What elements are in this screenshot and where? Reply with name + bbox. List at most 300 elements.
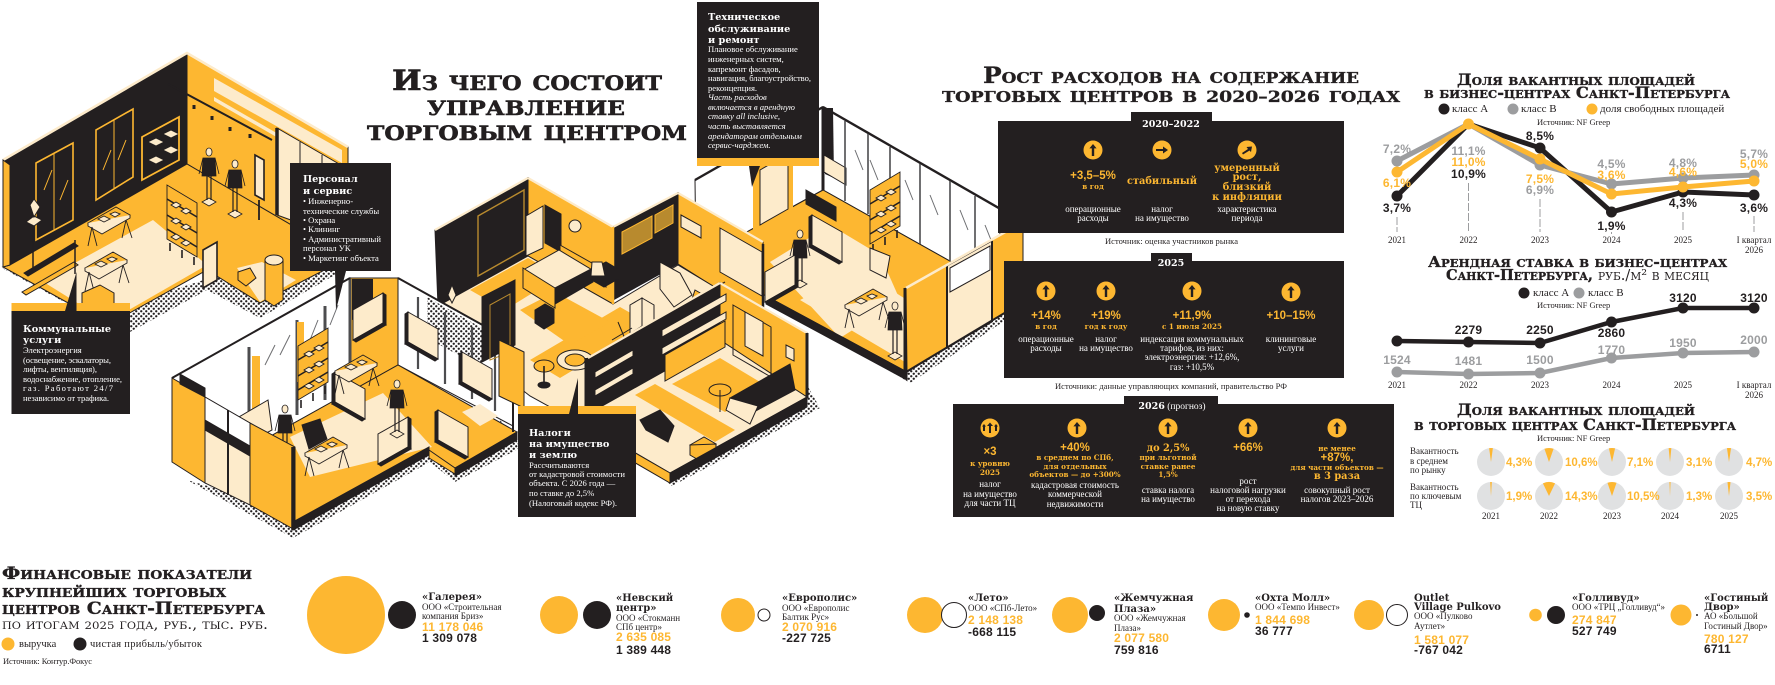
data labels: 5,7% xyxy=(1740,147,1768,161)
callout: staff and services: • Клининг xyxy=(303,224,341,234)
item: Galereya xyxy=(307,576,501,654)
source note: Источник: Контур.Фокус xyxy=(3,656,92,666)
item: Evropolis: ООО «Европолис xyxy=(782,603,850,613)
item: tax x3 xyxy=(963,418,1017,508)
item: Hollywood: «Голливуд» xyxy=(1572,593,1640,604)
item: Galereya: 11 178 046 xyxy=(422,620,484,634)
data labels: 3,6% xyxy=(1740,201,1768,215)
callout: maintenance and repair: включается в арендную xyxy=(708,102,795,112)
item: operating costs: операционные xyxy=(1065,204,1121,214)
year axis: 2025 xyxy=(1720,511,1738,521)
chart: office vacancy: Источник: NF Greep xyxy=(1537,117,1610,127)
item: tax x3: на имущество xyxy=(963,489,1017,499)
item: tax rate: 1,5% xyxy=(1158,470,1178,479)
callout: maintenance and repair: часть выставляется xyxy=(708,121,786,131)
year axis: 2026 xyxy=(1745,245,1764,255)
year axis: 2023 xyxy=(1531,235,1550,245)
callout: maintenance and repair: Часть расходов xyxy=(708,92,767,102)
year axis: 2024 xyxy=(1602,235,1621,245)
year axis: 2022 xyxy=(1460,235,1478,245)
year axis: 2024 xyxy=(1602,380,1621,390)
item: Nevsky Centre: 2 635 085 xyxy=(616,630,671,644)
chart: retail vacancy pies xyxy=(1410,400,1772,521)
callout: property and land taxes: (Налоговый кодекс РФ). xyxy=(529,498,617,508)
item: Hollywood: 527 749 xyxy=(1572,624,1617,638)
item: Evropolis: -227 725 xyxy=(782,631,831,645)
chart: retail vacancy pies: Источник: NF Greep xyxy=(1537,433,1610,443)
item: tax rate: ставке ранее xyxy=(1141,462,1196,471)
pies: key shopping centres: 3,5% xyxy=(1746,491,1772,503)
item: Gostiny Dvor: Двор» xyxy=(1704,602,1740,613)
legend: revenue and profit: чистая прибыль/убыток xyxy=(90,639,203,650)
panel: 2020-2022 xyxy=(998,112,1344,233)
data labels: 3120 xyxy=(1740,291,1768,305)
series: class A xyxy=(1392,302,1760,348)
heading: financial indicators: центров Санкт-Петербурга xyxy=(2,599,265,619)
item: tax rate: на имущество xyxy=(1141,494,1195,504)
data labels: 2250 xyxy=(1526,323,1554,337)
item: Zhemchuzhnaya Plaza: Плаза» xyxy=(1114,623,1141,633)
callout: staff and services: • Административный xyxy=(303,234,381,244)
illustration: isometric shopping centre xyxy=(2,53,1023,538)
callout: maintenance and repair: инженерных систем, xyxy=(708,54,784,64)
item: tax x3: 2025 xyxy=(980,468,1000,477)
legend xyxy=(1438,103,1724,115)
callout: maintenance and repair: Плановое обслуживание xyxy=(708,44,798,54)
heading: Доля вакантных площадей xyxy=(1457,400,1695,419)
legend: класс В xyxy=(1588,287,1624,299)
data labels: 1950 xyxy=(1669,336,1697,350)
pies: key shopping centres: 1,9% xyxy=(1506,491,1532,503)
room 1: top-left shop xyxy=(3,53,348,325)
item: Zhemchuzhnaya Plaza: ООО «Жемчужная xyxy=(1114,613,1186,623)
item: Evropolis: 2 070 916 xyxy=(782,620,837,634)
item: Leto: 2 148 138 xyxy=(968,613,1023,627)
item: Evropolis: «Европолис» xyxy=(782,593,857,604)
pies: key shopping centres: 10,5% xyxy=(1627,491,1660,503)
data labels: 4,6% xyxy=(1669,165,1697,179)
item: operating costs: расходы xyxy=(1077,213,1109,223)
heading: cost growth: Рост расходов на содержание xyxy=(983,63,1359,89)
data labels: 1770 xyxy=(1598,343,1625,357)
item: Gostiny Dvor: АО «Большой xyxy=(1704,611,1758,621)
item: cleaning: +10–15% xyxy=(1267,310,1315,322)
item: tax burden: на новую ставку xyxy=(1217,503,1280,513)
item: cadastral value: коммерческой xyxy=(1048,489,1102,499)
legend: класс А xyxy=(1533,287,1569,299)
item: Nevsky Centre: СПб центр» xyxy=(616,622,662,632)
item: Outlet Village Pulkovo: ООО «Пулково xyxy=(1414,611,1473,621)
callout: property and land taxes: и землю xyxy=(529,450,577,461)
legend: класс А xyxy=(1452,103,1488,115)
item: period character: рост, xyxy=(1233,172,1261,183)
item: period character: периода xyxy=(1232,213,1262,223)
heading: financial indicators: по итогам 2025 года, руб., тыс. руб. xyxy=(2,617,268,633)
item: cumulative growth: +87%, xyxy=(1321,452,1353,464)
callout: staff and services: Персонал xyxy=(303,174,358,185)
heading: Арендная ставка в бизнес-центрах xyxy=(1428,253,1727,271)
item: cumulative growth: для части объектов — xyxy=(1290,463,1384,472)
callout: utilities: газ. Работают 24/7 xyxy=(23,383,114,393)
callout: property and land taxes: по ставке до 2,5% xyxy=(529,488,594,498)
row labels: Вакантность xyxy=(1410,482,1459,492)
row labels: ТЦ xyxy=(1410,500,1422,510)
panel: 2025: 2025 xyxy=(1158,258,1184,269)
chart: office vacancy xyxy=(1383,70,1772,255)
item: tax x3: ×3 xyxy=(983,446,997,458)
item: tax burden xyxy=(1210,418,1286,513)
data labels: 2000 xyxy=(1740,333,1768,347)
item: cadastral value: кадастровая стоимость xyxy=(1031,480,1119,490)
item: property tax: стабильный xyxy=(1127,176,1197,187)
item: property tax: год к году xyxy=(1085,322,1128,331)
item: Zhemchuzhnaya Plaza: 759 816 xyxy=(1114,643,1159,657)
row labels xyxy=(1410,446,1462,510)
item: Outlet Village Pulkovo: 1 581 077 xyxy=(1414,633,1469,647)
callout: utilities: независимо от трафика. xyxy=(23,393,109,403)
legend: доля свободных площадей xyxy=(1600,103,1724,115)
data labels: 11,0% xyxy=(1451,155,1486,169)
item: period character xyxy=(1212,140,1282,223)
title: Из чего состоит xyxy=(392,64,662,97)
pies: key shopping centres xyxy=(1477,482,1772,510)
panel: 2026 forecast xyxy=(953,396,1394,517)
item: Okhta Mall: 1 844 698 xyxy=(1255,613,1310,627)
item: cadastral value: в среднем по СПб, xyxy=(1036,453,1114,462)
item: Nevsky Centre: «Невский xyxy=(616,593,674,604)
item: cumulative growth: налогов 2023–2026 xyxy=(1301,494,1374,504)
year axis: 2022 xyxy=(1540,511,1558,521)
item: Hollywood: 274 847 xyxy=(1572,613,1617,627)
room 2: bottom-left glass-walled shop xyxy=(172,278,517,530)
item: tax rate: ставка налога xyxy=(1142,485,1194,495)
item: property tax: на имущество xyxy=(1135,213,1189,223)
data labels: 7,2% xyxy=(1383,142,1411,156)
heading: cost growth xyxy=(942,63,1400,108)
year axis: 2025 xyxy=(1674,235,1692,245)
pies: market average: 4,7% xyxy=(1746,457,1772,469)
series: total vacancy xyxy=(1392,118,1760,200)
item: tax burden: рост xyxy=(1239,476,1257,486)
item: operating costs: в год xyxy=(1035,322,1057,331)
item: utility tariffs: газ: +10,5% xyxy=(1170,362,1215,372)
item: Zhemchuzhnaya Plaza xyxy=(1052,593,1194,657)
item: tax burden: от перехода xyxy=(1226,494,1270,504)
row labels: по ключевым xyxy=(1410,491,1462,501)
callout: property and land taxes: Налоги xyxy=(529,428,571,439)
item: operating costs: операционные xyxy=(1018,334,1074,344)
data labels: 1,9% xyxy=(1597,219,1626,233)
item: utility tariffs: +11,9% xyxy=(1173,310,1211,322)
item: Gostiny Dvor: 780 127 xyxy=(1704,632,1749,646)
data labels: 1524 xyxy=(1383,353,1411,367)
year axis: 2023 xyxy=(1531,380,1550,390)
year axis: 2021 xyxy=(1388,380,1406,390)
series: class A xyxy=(1392,124,1760,218)
callout: utilities xyxy=(12,272,130,414)
heading: в торговых центрах Санкт-Петербурга xyxy=(1414,415,1736,434)
item: Okhta Mall: 36 777 xyxy=(1255,624,1293,638)
callout: utilities: лифты, вентиляция), xyxy=(23,364,97,374)
year axis: 2021 xyxy=(1482,511,1500,521)
room 3: bedroom floor and walls xyxy=(435,178,807,473)
year axis: 2021 xyxy=(1388,235,1406,245)
item: cadastral value: недвижимости xyxy=(1047,499,1103,509)
year axis: 2022 xyxy=(1460,380,1478,390)
item: cadastral value: для отдельных xyxy=(1044,462,1107,471)
heading: cost growth: торговых центров в 2020–2026 годах xyxy=(942,82,1400,108)
item: cleaning xyxy=(1266,282,1316,353)
item: Galereya: компания Бриз» xyxy=(422,611,483,621)
item: tax x3: для части ТЦ xyxy=(965,498,1016,508)
item: period character: к инфляции xyxy=(1212,192,1282,203)
panel: 2025 xyxy=(1004,253,1344,378)
year axis: 2023 xyxy=(1603,511,1622,521)
item: cadastral value: объектов — до +300% xyxy=(1029,470,1121,479)
item: Zhemchuzhnaya Plaza: 2 077 580 xyxy=(1114,631,1169,645)
heading: Санкт-Петербурга, руб./м² в месяц xyxy=(1446,266,1709,284)
item: Gostiny Dvor: «Гостиный xyxy=(1704,593,1769,604)
callout: maintenance and repair: арендаторам отдельным xyxy=(708,131,802,141)
chart: office rent xyxy=(1383,253,1772,400)
callout: maintenance and repair: Техническое xyxy=(708,12,780,23)
callout: utilities: Коммунальные xyxy=(23,324,111,335)
data labels: 5,0% xyxy=(1740,157,1768,171)
item: Leto: -668 115 xyxy=(968,625,1016,639)
item: Galereya: ООО «Строительная xyxy=(422,602,501,612)
callout: utilities: (освещение, эскалаторы, xyxy=(23,355,111,365)
callout: staff and services: и сервис xyxy=(303,186,352,197)
item: Nevsky Centre: ООО «Стокманн xyxy=(616,613,680,623)
callout: utilities: водоснабжение, отопление, xyxy=(23,374,122,384)
pies: key shopping centres: 1,3% xyxy=(1686,491,1712,503)
item: utility tariffs: с 1 июля 2025 xyxy=(1162,322,1222,331)
data labels: 6,9% xyxy=(1526,183,1554,197)
heading xyxy=(1428,253,1727,284)
room 4: bathroom xyxy=(613,193,763,318)
callout: staff and services: персонал УК xyxy=(303,243,351,253)
callout: utilities: Электроэнергия xyxy=(23,345,82,355)
callout: property and land taxes xyxy=(518,378,636,517)
item: operating costs: +3,5–5% xyxy=(1070,170,1116,182)
series: class B xyxy=(1392,346,1760,380)
callout: maintenance and repair: реконцепция. xyxy=(708,83,757,93)
item: utility tariffs: электроэнергия: +12,6%, xyxy=(1145,352,1239,362)
heading xyxy=(1414,400,1736,434)
item: tax burden: налоговой нагрузки xyxy=(1210,485,1286,495)
heading: financial indicators xyxy=(2,564,268,633)
item: period character: характеристика xyxy=(1217,204,1277,214)
item: Leto: «Лето» xyxy=(968,593,1009,604)
partition between room 2 and room 3 xyxy=(482,280,524,408)
callout: maintenance and repair: ставку all inclusive, xyxy=(708,111,780,121)
source note: Источник: оценка участников рынка xyxy=(1105,236,1238,246)
item: Gostiny Dvor: 6711 xyxy=(1704,642,1731,656)
legend: класс В xyxy=(1521,103,1557,115)
series: class B xyxy=(1392,124,1760,190)
item: Nevsky Centre xyxy=(540,593,680,657)
year axis xyxy=(1388,380,1772,400)
year axis xyxy=(1388,235,1772,255)
heading xyxy=(1424,70,1730,102)
callout: property and land taxes: от кадастровой стоимости xyxy=(529,469,625,479)
item: cumulative growth: совокупный рост xyxy=(1304,485,1370,495)
item: tax x3: к уровню xyxy=(970,459,1010,468)
heading: financial indicators: крупнейших торговых xyxy=(2,582,227,602)
item: Hollywood xyxy=(1529,593,1665,638)
room 5: front living room xyxy=(586,282,807,483)
item: Outlet Village Pulkovo: Аутлет» xyxy=(1414,621,1445,631)
item: tax rate: при льготной xyxy=(1139,453,1197,462)
data labels: 7,5% xyxy=(1526,172,1554,186)
item: operating costs xyxy=(1018,282,1074,353)
item: period character: умеренный xyxy=(1214,163,1280,174)
item: cadastral value: +40% xyxy=(1060,442,1090,454)
year axis: I квартал xyxy=(1737,380,1772,390)
item: Outlet Village Pulkovo: -767 042 xyxy=(1414,643,1463,657)
legend: revenue and profit: выручка xyxy=(19,639,57,650)
item: cumulative growth: в 3 раза xyxy=(1314,471,1361,482)
item: Evropolis: Балтик Рус» xyxy=(782,612,829,622)
item: operating costs xyxy=(1065,140,1121,223)
callout: staff and services xyxy=(290,163,391,310)
item: Outlet Village Pulkovo xyxy=(1354,593,1501,657)
data labels: 2860 xyxy=(1598,326,1625,340)
pies: key shopping centres: 14,3% xyxy=(1565,491,1598,503)
legend xyxy=(1518,287,1624,299)
item: cleaning: услуги xyxy=(1278,343,1304,353)
heading: Доля вакантных площадей xyxy=(1457,70,1695,89)
item: cumulative growth xyxy=(1290,418,1384,504)
data labels xyxy=(1383,129,1768,233)
item: Okhta Mall: «Охта Молл» xyxy=(1255,593,1330,604)
item: tax x3: налог xyxy=(979,479,1001,489)
legend: revenue and profit xyxy=(2,638,203,650)
callout: property and land taxes: Рассчитываются xyxy=(529,460,589,470)
item: operating costs: расходы xyxy=(1030,343,1062,353)
item: utility tariffs: индексация коммунальных xyxy=(1140,334,1244,344)
item: Leto: ООО «СПб-Лето» xyxy=(968,603,1037,613)
item: property tax: налог xyxy=(1095,334,1117,344)
item: utility tariffs: тарифов, из них: xyxy=(1160,343,1224,353)
pies: market average: 7,1% xyxy=(1627,457,1653,469)
data labels: 3120 xyxy=(1669,291,1697,305)
item: cleaning: клининговые xyxy=(1266,334,1316,344)
row labels: в среднем xyxy=(1410,456,1448,466)
item: Okhta Mall xyxy=(1208,593,1340,638)
item: Leto xyxy=(907,593,1037,639)
callout: property and land taxes: на имущество xyxy=(529,439,610,450)
callout: maintenance and repair: навигация, благоустройство, xyxy=(708,73,811,83)
room 6: right glass-walled shop xyxy=(695,107,1023,380)
item: Gostiny Dvor xyxy=(1670,593,1769,656)
data labels: 2279 xyxy=(1455,323,1482,337)
pies: market average: 4,3% xyxy=(1506,457,1532,469)
item: tax rate: до 2,5% xyxy=(1147,443,1190,454)
pies: market average xyxy=(1477,448,1772,476)
callout: maintenance and repair: капремонт фасадов, xyxy=(708,64,781,74)
year axis: 2026 xyxy=(1745,390,1764,400)
item: Okhta Mall: ООО «Темпо Инвест» xyxy=(1255,602,1340,612)
heading: financial indicators: Финансовые показатели xyxy=(2,564,252,584)
item: Nevsky Centre: 1 389 448 xyxy=(616,643,671,657)
item: operating costs: в год xyxy=(1082,182,1104,191)
data labels: 1481 xyxy=(1455,354,1482,368)
heading: в бизнес-центрах Санкт-Петербурга xyxy=(1424,83,1730,102)
row labels: Вакантность xyxy=(1410,446,1459,456)
item: property tax xyxy=(1079,282,1133,353)
callout: staff and services: технические службы xyxy=(303,206,379,216)
data labels: 10,9% xyxy=(1451,167,1486,181)
source note: Источники: данные управляющих компаний, правительство РФ xyxy=(1055,381,1287,391)
item: Zhemchuzhnaya Plaza: «Жемчужная xyxy=(1114,593,1194,604)
item: property tax: +19% xyxy=(1091,310,1121,322)
halftone shadows xyxy=(2,250,1006,538)
item: Outlet Village Pulkovo: Outlet xyxy=(1414,593,1450,604)
item: Galereya: «Галерея» xyxy=(422,592,482,603)
item: Outlet Village Pulkovo: Village Pulkovo xyxy=(1413,602,1501,613)
callout: maintenance and repair: и ремонт xyxy=(708,35,759,46)
callout: maintenance and repair xyxy=(697,2,819,187)
item: utility tariffs xyxy=(1140,282,1244,372)
data labels: 3,7% xyxy=(1383,201,1411,215)
item: period character: близкий xyxy=(1223,182,1271,193)
data labels xyxy=(1383,291,1768,368)
panel: 2020-2022: 2020–2022 xyxy=(1142,119,1200,130)
data labels: 11,1% xyxy=(1451,144,1486,158)
item: tax rate xyxy=(1139,418,1197,504)
data labels: 8,5% xyxy=(1526,129,1554,143)
callout: property and land taxes: объекта. С 2026 года — xyxy=(529,478,616,488)
row labels: по рынку xyxy=(1410,465,1446,475)
item: property tax: налог xyxy=(1151,204,1173,214)
data labels: 4,8% xyxy=(1669,156,1697,170)
tick lines xyxy=(1397,183,1754,234)
data labels: 3,6% xyxy=(1597,168,1626,182)
callout: maintenance and repair: сервис-чарджем. xyxy=(708,140,771,150)
title: торговым центром xyxy=(367,114,687,147)
pies: market average: 3,1% xyxy=(1686,457,1712,469)
year axis: 2025 xyxy=(1674,380,1692,390)
item: Nevsky Centre: центр» xyxy=(616,603,657,614)
pies: market average: 10,6% xyxy=(1565,457,1598,469)
callout: staff and services: • Охрана xyxy=(303,215,335,225)
data labels: 4,3% xyxy=(1669,196,1697,210)
item: Evropolis xyxy=(721,593,857,645)
callout: staff and services: • Инженерно- xyxy=(303,196,353,206)
item: cadastral value xyxy=(1029,418,1121,509)
item: Gostiny Dvor: Гостиный Двор» xyxy=(1704,621,1768,631)
item: cumulative growth: не менее xyxy=(1318,444,1356,453)
item: property tax xyxy=(1127,140,1197,223)
title: управление xyxy=(427,89,625,122)
callout: utilities: услуги xyxy=(23,335,61,346)
title xyxy=(367,64,687,147)
item: property tax: на имущество xyxy=(1079,343,1133,353)
panel: 2026 forecast: 2026 (прогноз) xyxy=(1138,401,1206,412)
year axis: 2024 xyxy=(1661,511,1680,521)
callout: maintenance and repair: обслуживание xyxy=(708,24,790,35)
item: operating costs: +14% xyxy=(1031,310,1061,322)
year axis xyxy=(1482,511,1738,521)
data labels: 4,5% xyxy=(1597,157,1626,171)
item: Zhemchuzhnaya Plaza: Плаза» xyxy=(1114,604,1156,615)
data labels: 6,1% xyxy=(1383,176,1411,190)
item: Galereya: 1 309 078 xyxy=(422,631,477,645)
item: Hollywood: ООО «ТРЦ „Голливуд“» xyxy=(1572,602,1665,612)
item: tax burden: +66% xyxy=(1233,442,1263,454)
year axis: I квартал xyxy=(1737,235,1772,245)
